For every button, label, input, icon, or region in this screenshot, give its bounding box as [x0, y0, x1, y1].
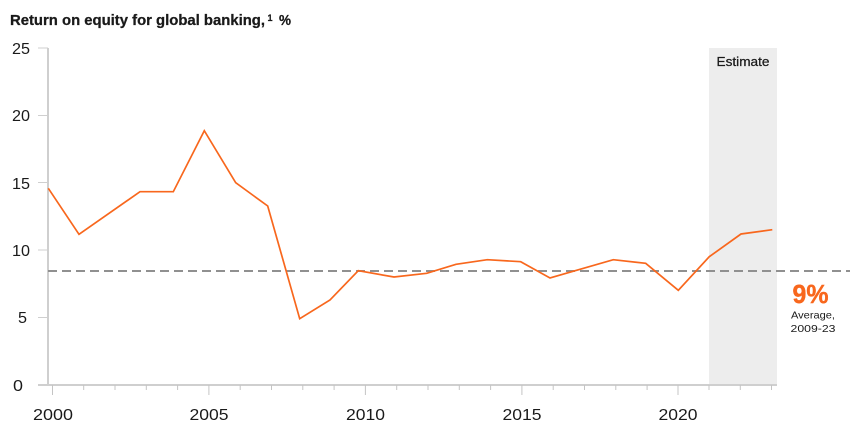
- x axis: 2010: [346, 407, 385, 424]
- average callout: [790, 279, 836, 335]
- x axis: [33, 385, 777, 424]
- x axis: 2020: [658, 407, 698, 424]
- y axis: 25: [12, 41, 30, 58]
- x axis: 2000: [33, 407, 73, 424]
- estimate label: Estimate: [716, 55, 770, 69]
- y axis: [12, 41, 48, 395]
- average callout: 2009-23: [790, 323, 836, 335]
- y axis: 10: [12, 243, 30, 260]
- return on equity line: [48, 131, 772, 319]
- y axis: 20: [12, 108, 30, 125]
- title: Return on equity for global banking,: [10, 13, 265, 29]
- average callout: 9%: [792, 279, 828, 309]
- y axis: 5: [18, 310, 27, 327]
- y axis: 0: [13, 378, 23, 395]
- average dashed line: [48, 270, 850, 272]
- y axis: 15: [12, 176, 30, 193]
- x axis: 2015: [502, 407, 542, 424]
- average callout: Average,: [791, 310, 835, 322]
- estimate shaded band: [709, 48, 777, 385]
- x axis: 2005: [190, 407, 228, 424]
- title: 1: [268, 13, 273, 23]
- title: %: [279, 13, 291, 29]
